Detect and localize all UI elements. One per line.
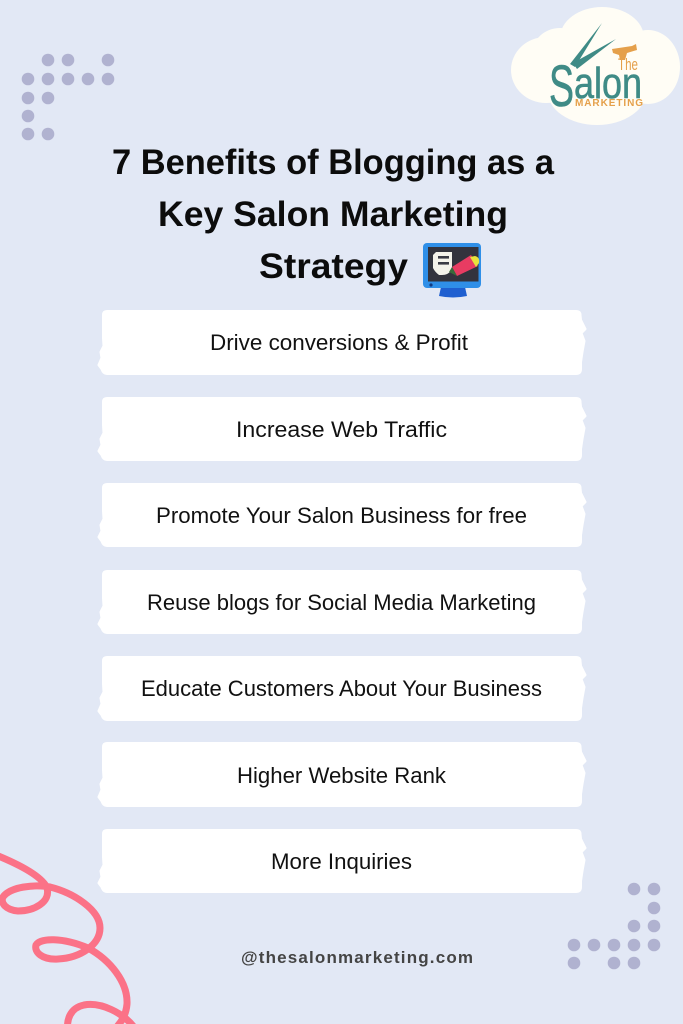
- title: Strategy: [259, 247, 409, 286]
- benefit card 2: Increase Web Traffic: [236, 417, 447, 442]
- decorative dot grid: bottom right: [568, 883, 660, 969]
- benefit card 7: [99, 830, 585, 892]
- benefit card 4: [99, 572, 585, 632]
- benefit card 3: [99, 484, 585, 546]
- benefit card 2: [99, 398, 585, 460]
- title: 7 Benefits of Blogging as a: [112, 143, 555, 182]
- logo wordmark Salon: S: [549, 54, 574, 119]
- decorative dot grid: top left: [22, 54, 114, 140]
- benefit card 7: More Inquiries: [271, 849, 412, 874]
- footer website handle: @thesalonmarketing.com: [241, 948, 473, 967]
- benefit card 5: [99, 658, 585, 720]
- benefit card 5: Educate Customers About Your Business: [141, 676, 542, 701]
- logo hair dryer: [612, 44, 637, 60]
- icon: computer monitor with paper and pencil: [423, 243, 481, 298]
- pink spiral squiggle: [0, 855, 136, 1024]
- benefit card 6: [99, 744, 585, 806]
- logo wordmark Marketing: MARKETING: [575, 98, 643, 109]
- logo: The Salon Marketing: [511, 7, 680, 125]
- logo wordmark The: The: [618, 55, 638, 74]
- logo scissors: [570, 23, 616, 69]
- benefit card 6: Higher Website Rank: [237, 763, 447, 788]
- benefit card 1: [99, 312, 585, 374]
- logo cloud background: [511, 7, 680, 125]
- title: [112, 143, 555, 286]
- logo wordmark Salon: alon: [574, 59, 642, 108]
- title: Key Salon Marketing: [158, 195, 508, 234]
- benefit card 3: Promote Your Salon Business for free: [156, 503, 527, 528]
- benefit card 1: Drive conversions & Profit: [210, 330, 468, 355]
- benefit card 4: Reuse blogs for Social Media Marketing: [147, 590, 536, 615]
